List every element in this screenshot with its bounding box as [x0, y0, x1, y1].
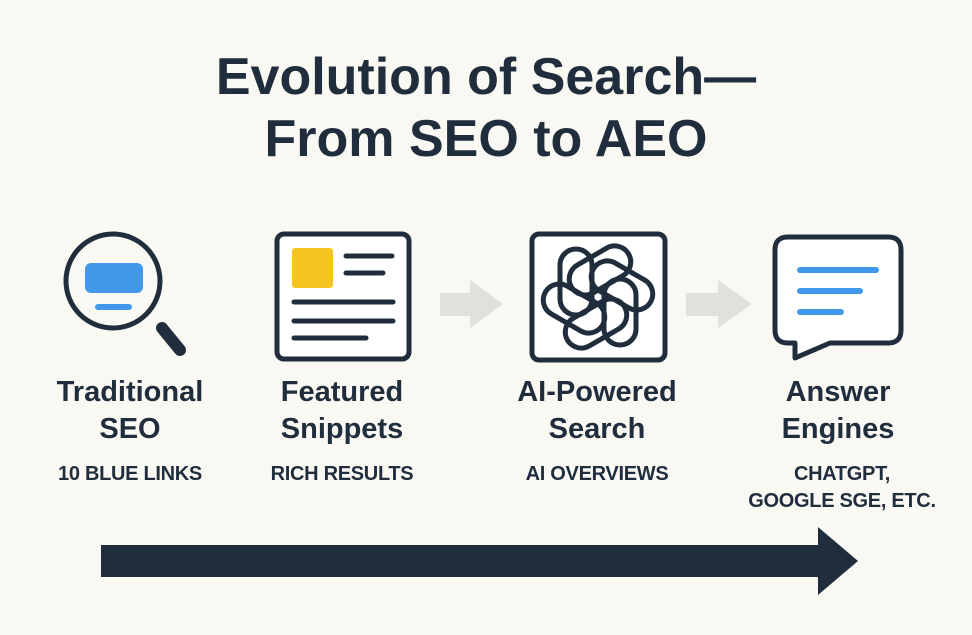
- label: Traditional SEO: SEO: [99, 413, 161, 445]
- label: AI-Powered Search: AI-Powered: [517, 376, 677, 408]
- arrow: step 1 to 2: [440, 280, 503, 328]
- label: Featured Snippets: Featured: [281, 376, 403, 408]
- arrow: step 3 to 4: [686, 280, 752, 328]
- sub: ChatGPT, Google SGE: CHATGPT,: [794, 463, 890, 485]
- label: AI-Powered Search: Search: [549, 413, 645, 445]
- icon: snippet document: [277, 234, 409, 359]
- label: AI-Powered Search: [517, 376, 677, 445]
- label: Traditional SEO: [56, 376, 203, 445]
- sub: ChatGPT, Google SGE: [748, 463, 936, 512]
- icon: magnifier: [66, 234, 180, 350]
- icon: AI logo box: [532, 234, 665, 360]
- sub: AI overviews: AI OVERVIEWS: [526, 463, 668, 485]
- sub: 10 blue links: 10 BLUE LINKS: [58, 463, 202, 485]
- icon: speech bubble: [775, 237, 901, 358]
- label: Answer Engines: Answer: [786, 376, 890, 408]
- timeline arrow: [101, 527, 858, 595]
- title: From SEO to AEO: [264, 110, 708, 168]
- label: Featured Snippets: [281, 376, 403, 445]
- label: Answer Engines: Engines: [782, 413, 894, 445]
- title: Evolution of Search—: [216, 48, 756, 106]
- sub: ChatGPT, Google SGE: GOOGLE SGE, ETC.: [748, 490, 936, 512]
- label: Answer Engines: [782, 376, 894, 445]
- label: Traditional SEO: Traditional: [57, 376, 203, 408]
- title: [216, 48, 756, 168]
- label: Featured Snippets: Snippets: [281, 413, 403, 445]
- sub: rich results: RICH RESULTS: [271, 463, 413, 485]
